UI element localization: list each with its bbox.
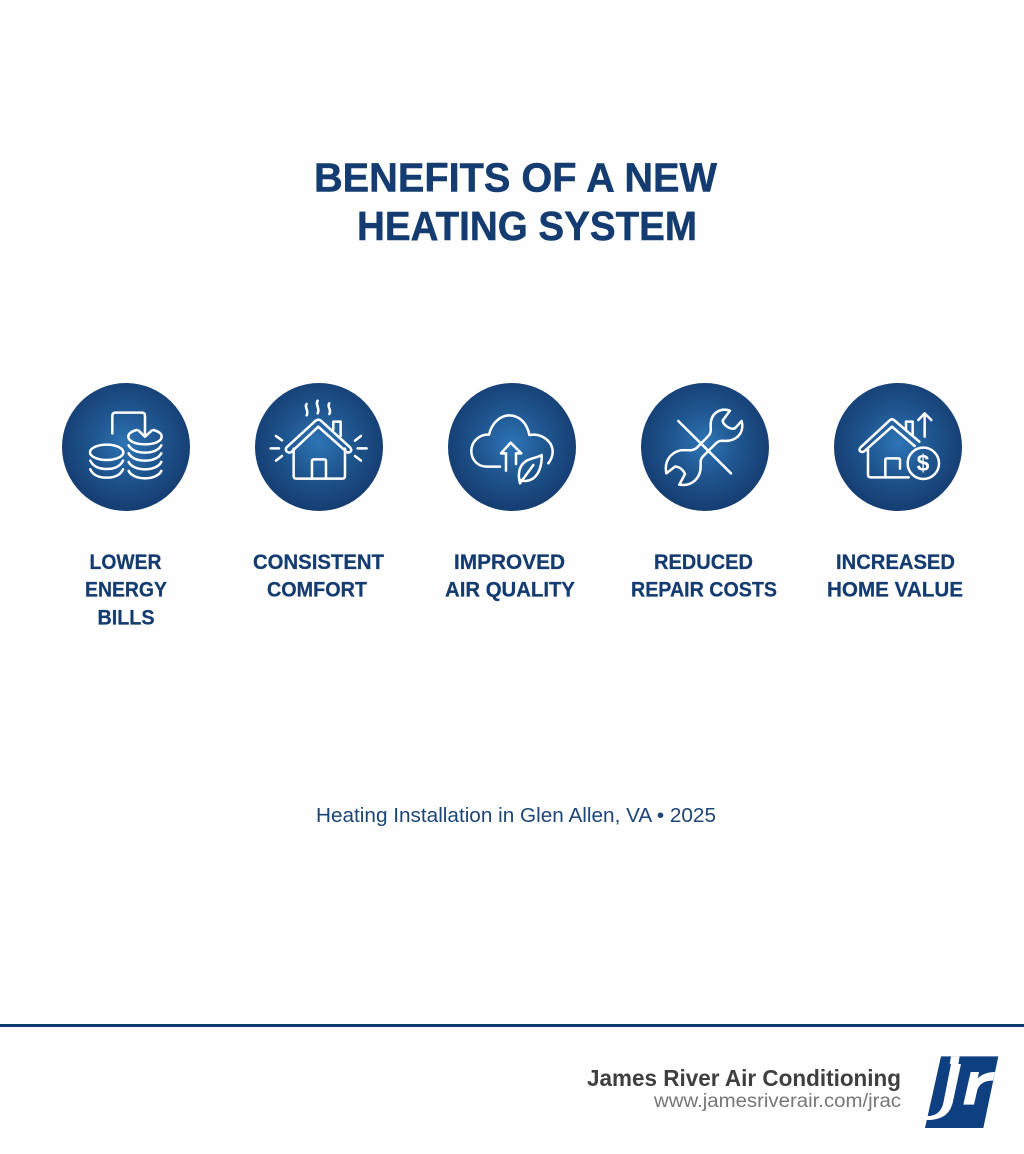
label: improved air quality: AIR QUALITY (445, 578, 575, 602)
label: increased home value: HOME VALUE (827, 578, 963, 602)
logo (925, 1056, 998, 1128)
subtitle: Heating Installation in Glen Allen, VA • 2025 (316, 805, 716, 827)
label: lower energy bills: LOWER (90, 550, 162, 574)
icon: wrench and screwdriver cross (641, 383, 769, 511)
label: increased home value: INCREASED (836, 550, 955, 574)
footer company name: James River Air Conditioning (587, 1065, 901, 1091)
title: BENEFITS OF A NEW (314, 155, 717, 201)
icon: coins with arrow (62, 383, 190, 511)
label: lower energy bills (85, 550, 167, 629)
label: increased home value (827, 550, 963, 602)
dollar sign: $ (917, 450, 930, 476)
label: improved air quality: IMPROVED (454, 550, 565, 574)
label: lower energy bills: BILLS (98, 605, 154, 629)
label: reduced repair costs (631, 550, 777, 602)
label: reduced repair costs: REDUCED (654, 550, 753, 574)
label: consistent comfort: CONSISTENT (253, 550, 384, 574)
title: HEATING SYSTEM (357, 203, 697, 249)
label: lower energy bills: ENERGY (85, 578, 167, 602)
label: consistent comfort: COMFORT (267, 578, 367, 602)
footer url: www.jamesriverair.com/jrac (653, 1091, 901, 1112)
label: reduced repair costs: REPAIR COSTS (631, 578, 777, 602)
icon: cloud with leaf (448, 383, 576, 511)
icon: house with warmth (255, 383, 383, 511)
label: consistent comfort (253, 550, 384, 602)
title (314, 155, 717, 249)
label: improved air quality (445, 550, 575, 602)
icon: house value with dollar (834, 383, 962, 511)
